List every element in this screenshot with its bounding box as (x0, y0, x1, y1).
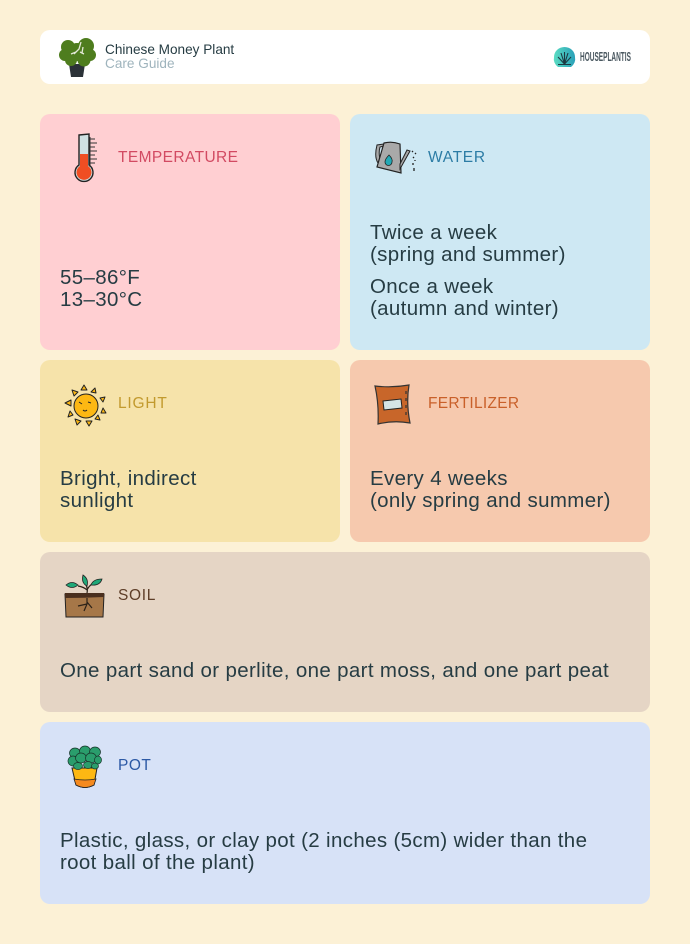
light requirement: Bright, indirect (60, 467, 197, 490)
light requirement (60, 467, 197, 512)
icon: watering can (375, 142, 416, 174)
temperature ranges: 13–30°C (60, 288, 142, 311)
watering schedule: spring and summer (370, 221, 566, 266)
watering schedule: autumn and winter (370, 275, 559, 320)
light requirement: sunlight (60, 489, 133, 512)
fertilizer schedule: Every 4 weeks (370, 467, 508, 490)
label: TEMPERATURE (118, 149, 238, 166)
label: FERTILIZER (428, 395, 519, 412)
fertilizer schedule (370, 467, 611, 512)
panel: soil (40, 552, 650, 712)
panel: pot (40, 722, 650, 904)
pot guidance (60, 829, 587, 874)
logo: houseplantis (554, 47, 631, 67)
panel: fertilizer (350, 360, 650, 542)
pot guidance: root ball of the plant) (60, 851, 255, 874)
logo mark (554, 47, 576, 67)
subtitle: Care Guide (105, 56, 175, 71)
icon: fertilizer bag (374, 384, 411, 425)
watering schedule: autumn and winter: (autumn and winter) (370, 297, 559, 320)
watering schedule: spring and summer: (spring and summer) (370, 243, 566, 266)
icon: money plant (59, 38, 96, 77)
label: POT (118, 757, 151, 774)
icon: potted plant (68, 746, 102, 788)
icon: sun (64, 384, 106, 426)
pot guidance: Plastic, glass, or clay pot (2 inches (5cm) wider than the (60, 829, 587, 852)
temperature ranges: 55–86°F (60, 266, 140, 289)
panel: light (40, 360, 340, 542)
label: LIGHT (118, 395, 168, 412)
panel: temperature (40, 114, 340, 350)
label: WATER (428, 149, 486, 166)
watering schedule: spring and summer: Twice a week (370, 221, 497, 244)
fertilizer schedule: (only spring and summer) (370, 489, 611, 512)
icon: soil with sprout (64, 574, 104, 618)
plant name: Chinese Money Plant (105, 42, 234, 57)
soil mix: One part sand or perlite, one part moss, and one part peat (60, 659, 609, 682)
logo wordmark: HOUSEPLANTIS (580, 50, 631, 64)
header bar (40, 30, 650, 84)
label: SOIL (118, 587, 156, 604)
watering schedule: autumn and winter: Once a week (370, 275, 494, 298)
temperature ranges (60, 266, 142, 311)
icon: thermometer (74, 133, 97, 182)
panel: water (350, 114, 650, 350)
